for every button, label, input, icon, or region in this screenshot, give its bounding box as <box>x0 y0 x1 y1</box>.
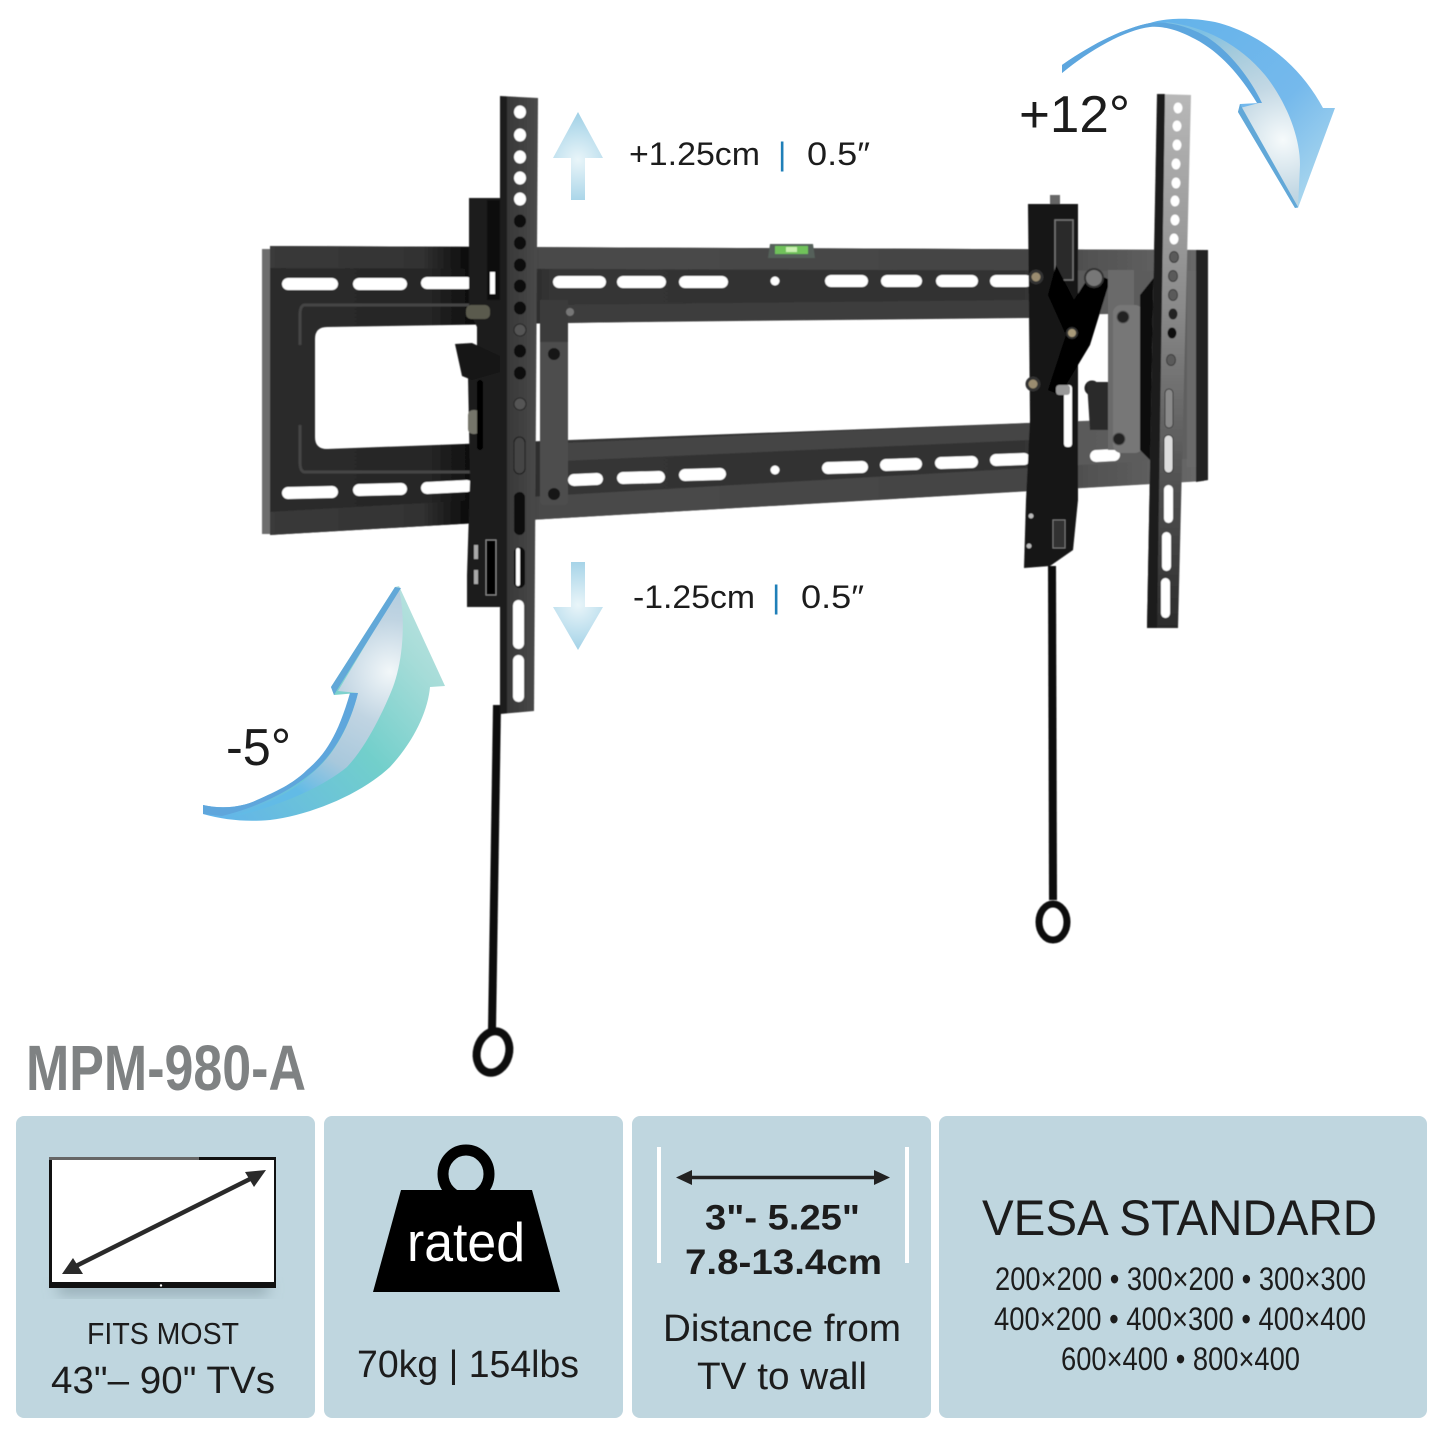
text: TV size range: 43"– 90" TVs <box>51 1360 275 1402</box>
label: height down <box>633 579 864 615</box>
right cord with ring <box>1039 566 1067 940</box>
panel: wall distance <box>632 1116 931 1418</box>
label: height down: 0.5″ <box>801 579 864 615</box>
left tilt arm <box>500 96 538 714</box>
right tilt arm <box>1147 94 1191 628</box>
mounting slots <box>288 281 1114 493</box>
text: distance caption <box>663 1308 901 1398</box>
icon: TV with diagonal arrow <box>49 1157 276 1294</box>
arrow: tilt up -5 degrees <box>203 586 445 821</box>
label: height down: -1.25cm <box>633 579 755 615</box>
right clip bracket <box>1024 195 1160 568</box>
panel: VESA standard <box>939 1116 1427 1418</box>
icon: weight <box>373 1150 560 1292</box>
text: weight: 70kg | 154lbs <box>357 1344 579 1386</box>
text: VESA sizes: 200×200 • 300×200 • 300×300 <box>995 1261 1366 1297</box>
wall plate <box>262 246 1208 535</box>
label: -5 degrees: -5° <box>226 719 291 777</box>
arrow: tilt down +12 degrees <box>1062 19 1335 208</box>
icon: weight: rated <box>407 1211 525 1273</box>
left cord with ring <box>472 705 514 1076</box>
icon: distance arrow between white lines <box>657 1147 909 1263</box>
label: height down: | <box>772 579 780 615</box>
text: VESA sizes: 600×400 • 800×400 <box>1061 1341 1300 1377</box>
text: distance caption: Distance from <box>663 1308 901 1350</box>
text: distance values: 7.8-13.4cm <box>685 1243 882 1282</box>
label: height up: 0.5″ <box>807 136 870 172</box>
wall mount photo <box>262 94 1208 1076</box>
label: +12 degrees: +12° <box>1019 86 1130 144</box>
panel: TV size <box>16 1116 315 1418</box>
left clip bracket <box>455 198 574 607</box>
text: distance values <box>685 1198 882 1282</box>
model number: MPM-980-A <box>26 1032 306 1104</box>
arrow: height up <box>553 112 603 200</box>
text: VESA sizes <box>994 1261 1366 1377</box>
text: fits most: FITS MOST <box>87 1316 239 1351</box>
label: height up: +1.25cm <box>629 136 760 172</box>
panel: weight capacity <box>324 1116 623 1418</box>
arrow: height down <box>553 562 603 650</box>
text: VESA sizes: 400×200 • 400×300 • 400×400 <box>994 1301 1366 1337</box>
heading: VESA: VESA STANDARD <box>982 1190 1377 1246</box>
label: height up <box>629 136 870 172</box>
text: distance values: 3"- 5.25" <box>705 1198 860 1238</box>
label: height up: | <box>778 136 786 172</box>
bubble level <box>768 244 815 258</box>
text: distance caption: TV to wall <box>697 1356 867 1398</box>
